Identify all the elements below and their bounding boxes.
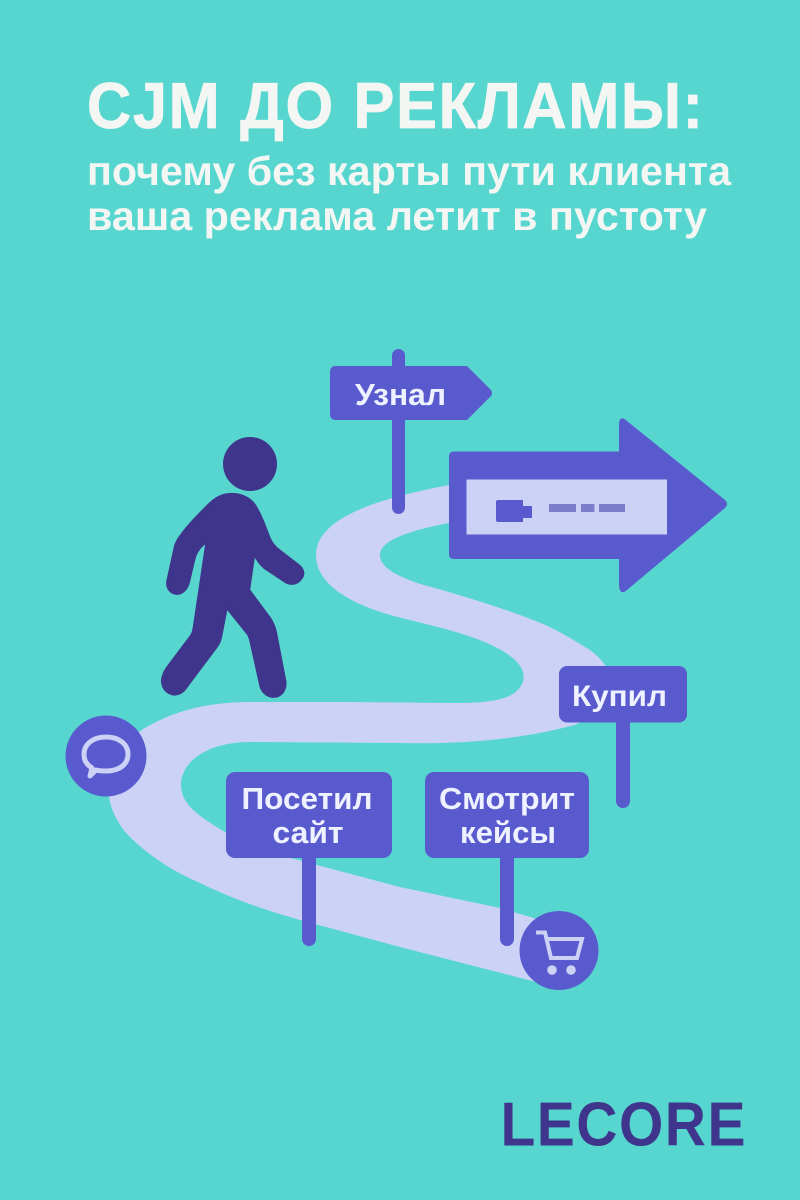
signpost: Купил: Купил <box>572 680 667 713</box>
signpost: Узнал <box>330 349 492 514</box>
title <box>87 70 732 239</box>
signpost: Смотрит кейсы <box>425 772 589 946</box>
signpost: Смотрит кейсы: кейсы <box>460 815 556 850</box>
icon: chat bubble circle <box>66 716 146 796</box>
signpost: Купил <box>559 666 687 808</box>
winding customer path <box>109 483 608 983</box>
big arrow with ad banner <box>449 418 727 592</box>
subtitle: ваша реклама летит в пустоту <box>87 193 707 239</box>
signpost: Посетил сайт <box>226 772 392 946</box>
title: CJM ДО РЕКЛАМЫ: <box>87 70 703 142</box>
signpost: Узнал: Узнал <box>355 377 446 412</box>
subtitle: почему без карты пути клиента <box>87 148 732 194</box>
ad banner panel <box>466 480 667 534</box>
banner icon <box>496 500 532 522</box>
icon: shopping cart circle <box>520 911 598 990</box>
signpost: Посетил сайт: Посетил <box>242 781 372 816</box>
signpost: Посетил сайт: сайт <box>272 815 344 850</box>
walking person <box>162 437 303 697</box>
signpost: Смотрит кейсы: Смотрит <box>439 781 575 816</box>
logo: LECORE <box>500 1089 746 1159</box>
subtitle <box>87 148 732 239</box>
banner dashes <box>549 504 625 512</box>
